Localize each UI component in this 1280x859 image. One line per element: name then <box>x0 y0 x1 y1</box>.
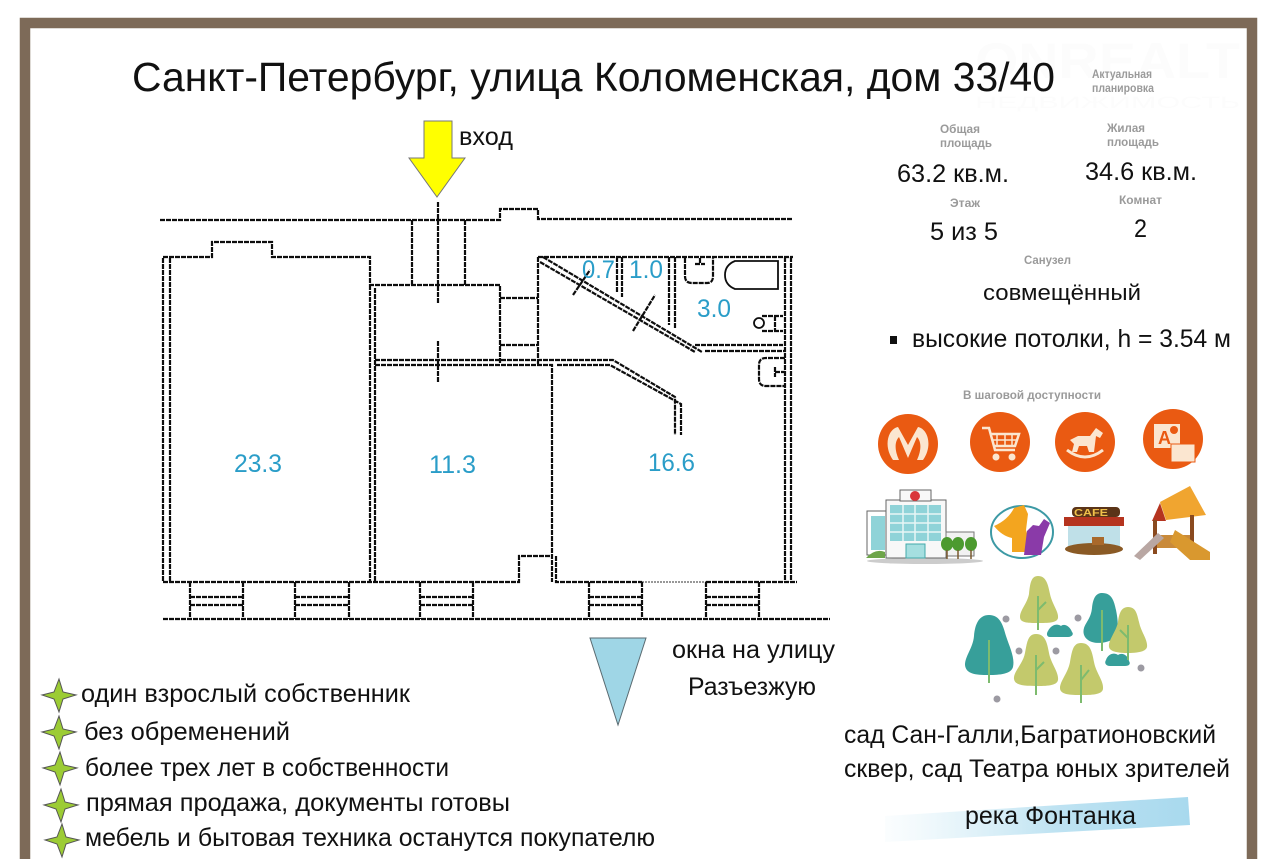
floor <box>930 198 998 246</box>
rooms: Комнат <box>1119 195 1162 207</box>
label: current layout: Актуальная <box>1092 69 1152 81</box>
watermark <box>975 33 1240 112</box>
rooms <box>1119 195 1162 243</box>
ceiling height: высокие потолки, h = 3.54 м <box>912 325 1231 353</box>
living area <box>1085 123 1197 186</box>
label: entrance: вход <box>459 123 513 151</box>
item: furniture stays: мебель и бытовая техника останутся покупателю <box>85 824 655 852</box>
bathroom <box>983 255 1141 305</box>
icon: shopping cart <box>970 412 1030 472</box>
bathroom: совмещённый <box>983 280 1141 305</box>
floor: Этаж <box>950 198 981 210</box>
living area: площадь <box>1107 137 1159 149</box>
text: nearby parks: сад Сан-Галли,Багратионовский <box>844 721 1216 749</box>
panel: apartment facts <box>890 69 1231 353</box>
room areas: 11.3 <box>429 451 476 479</box>
item: direct sale: прямая продажа, документы готовы <box>86 789 510 817</box>
teal trees <box>965 593 1130 675</box>
grass tufts <box>994 614 1144 702</box>
list: selling points <box>42 679 655 857</box>
room areas: 23.3 <box>234 450 282 478</box>
label: current layout <box>1092 69 1155 95</box>
room areas: 1.0 <box>629 256 663 284</box>
icon: gym <box>991 505 1053 558</box>
arrow: windows direction <box>590 638 646 725</box>
river band <box>885 797 1190 842</box>
icon: school book: A <box>1158 428 1171 448</box>
item: owned over three years: более трех лет в собственности <box>85 754 449 782</box>
label: windows: окна на улицу <box>672 636 835 664</box>
watermark: НЕДВИЖИМОСТЬ <box>975 93 1240 112</box>
rooms: 2 <box>1134 215 1147 243</box>
living area: Жилая <box>1106 123 1145 135</box>
label: current layout: планировка <box>1092 83 1155 95</box>
label: windows: Разъезжую <box>688 673 816 701</box>
room areas <box>234 256 731 479</box>
room areas: 16.6 <box>648 449 695 477</box>
total area: площадь <box>940 138 992 150</box>
room areas: 3.0 <box>697 295 731 323</box>
olive trees <box>1014 576 1147 695</box>
total area: Общая <box>940 124 980 136</box>
item: no encumbrances <box>42 716 290 749</box>
icon: cafe <box>1064 507 1124 555</box>
watermark: ONREALT <box>975 33 1240 89</box>
total area <box>897 124 1009 188</box>
label: windows <box>672 636 835 701</box>
item: single owner: один взрослый собственник <box>81 680 411 708</box>
total area: 63.2 кв.м. <box>897 160 1009 188</box>
icon: school book <box>1143 409 1203 469</box>
icon: rocking horse <box>1055 412 1115 472</box>
river band: река Фонтанка <box>965 802 1136 830</box>
arrow: entrance <box>409 121 465 197</box>
room areas: 0.7 <box>582 256 615 284</box>
icon: metro <box>878 414 938 474</box>
item: no encumbrances: без обременений <box>84 718 290 746</box>
text: nearby parks <box>844 721 1230 783</box>
illustration: park trees <box>965 576 1147 703</box>
living area: 34.6 кв.м. <box>1085 158 1197 186</box>
plan walls <box>160 202 830 619</box>
floor plan <box>160 202 830 619</box>
tree trunks <box>989 596 1128 703</box>
heading: В шаговой доступности <box>963 390 1101 402</box>
icon: playground <box>1134 486 1210 560</box>
text: nearby parks: сквер, сад Театра юных зрителей <box>844 755 1230 783</box>
floor: 5 из 5 <box>930 218 998 246</box>
title: Санкт-Петербург, улица Коломенская, дом 33/40 <box>132 54 1055 100</box>
panel: walkable amenities <box>866 390 1210 564</box>
icon: cafe: CAFE <box>1074 508 1108 519</box>
bathroom: Санузел <box>1024 255 1071 267</box>
icon: hospital <box>866 490 983 564</box>
